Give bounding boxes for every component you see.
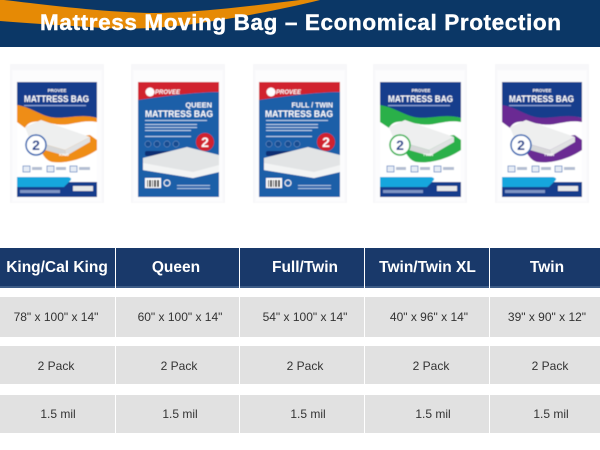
product: twin / twin xl bag: PROVEE bbox=[412, 88, 430, 93]
table header row bbox=[0, 248, 600, 288]
product: king bag: PROVEE bbox=[48, 88, 66, 93]
product: twin bag: MATTRESS BAG bbox=[509, 94, 574, 105]
title: Mattress Moving Bag – Economical Protection bbox=[40, 10, 561, 35]
product: queen bag: QUEEN bbox=[185, 100, 212, 110]
product: twin bag bbox=[495, 64, 589, 203]
table row: dimensions: 54" x 100" x 14" bbox=[263, 310, 347, 324]
table row: pack count: 2 Pack bbox=[413, 359, 450, 373]
table header row: King/Cal King bbox=[6, 259, 108, 276]
product: queen bag: 2 bbox=[201, 134, 209, 150]
table row: thickness: 1.5 mil bbox=[290, 407, 326, 421]
product: king bag: MATTRESS BAG bbox=[24, 94, 89, 105]
product: twin bag: 2 bbox=[517, 137, 525, 153]
table row: dimensions bbox=[0, 297, 600, 337]
product: twin / twin xl bag bbox=[373, 64, 467, 203]
table row: dimensions: 39" x 90" x 12" bbox=[508, 310, 586, 324]
product: queen bag: MATTRESS BAG bbox=[145, 109, 213, 120]
product: twin / twin xl bag: 2 bbox=[396, 137, 404, 153]
table row: pack count: 2 Pack bbox=[287, 359, 324, 373]
product: twin / twin xl bag: MATTRESS BAG bbox=[388, 94, 453, 105]
table row: dimensions: 78" x 100" x 14" bbox=[14, 310, 98, 324]
table row: thickness: 1.5 mil bbox=[40, 407, 76, 421]
table row: dimensions: 60" x 100" x 14" bbox=[138, 310, 222, 324]
product: full / twin bag: MATTRESS BAG bbox=[265, 109, 333, 120]
table header row: Twin/Twin XL bbox=[379, 259, 476, 276]
table row: pack count: 2 Pack bbox=[38, 359, 75, 373]
table row: thickness: 1.5 mil bbox=[533, 407, 569, 421]
product: queen bag: PROVEE bbox=[155, 90, 181, 96]
product: twin / twin xl bag: TWIN bbox=[423, 152, 433, 157]
product: king bag: 2 bbox=[32, 137, 40, 153]
title banner bbox=[0, 0, 600, 47]
table row: pack count: 2 Pack bbox=[532, 359, 569, 373]
product: king bag bbox=[10, 64, 104, 203]
product: king bag: KING bbox=[59, 152, 69, 157]
product: full / twin bag: 2 bbox=[322, 134, 330, 150]
orange swoosh bbox=[0, 0, 320, 29]
table row: dimensions: 40" x 96" x 14" bbox=[390, 310, 468, 324]
product: twin bag: TWIN bbox=[544, 152, 554, 157]
table row: thickness: 1.5 mil bbox=[162, 407, 198, 421]
table row: thickness: 1.5 mil bbox=[415, 407, 451, 421]
product: queen bag bbox=[131, 64, 225, 203]
product: full / twin bag bbox=[253, 64, 347, 203]
table header row: Twin bbox=[530, 259, 564, 276]
table row: pack count bbox=[0, 346, 600, 384]
product: full / twin bag: FULL / TWIN bbox=[292, 102, 333, 110]
table row: thickness bbox=[0, 395, 600, 433]
table header row: Full/Twin bbox=[272, 259, 338, 276]
table header row: Queen bbox=[152, 259, 200, 276]
table row: pack count: 2 Pack bbox=[161, 359, 198, 373]
product: full / twin bag: PROVEE bbox=[276, 90, 302, 96]
product: twin bag: PROVEE bbox=[533, 88, 551, 93]
